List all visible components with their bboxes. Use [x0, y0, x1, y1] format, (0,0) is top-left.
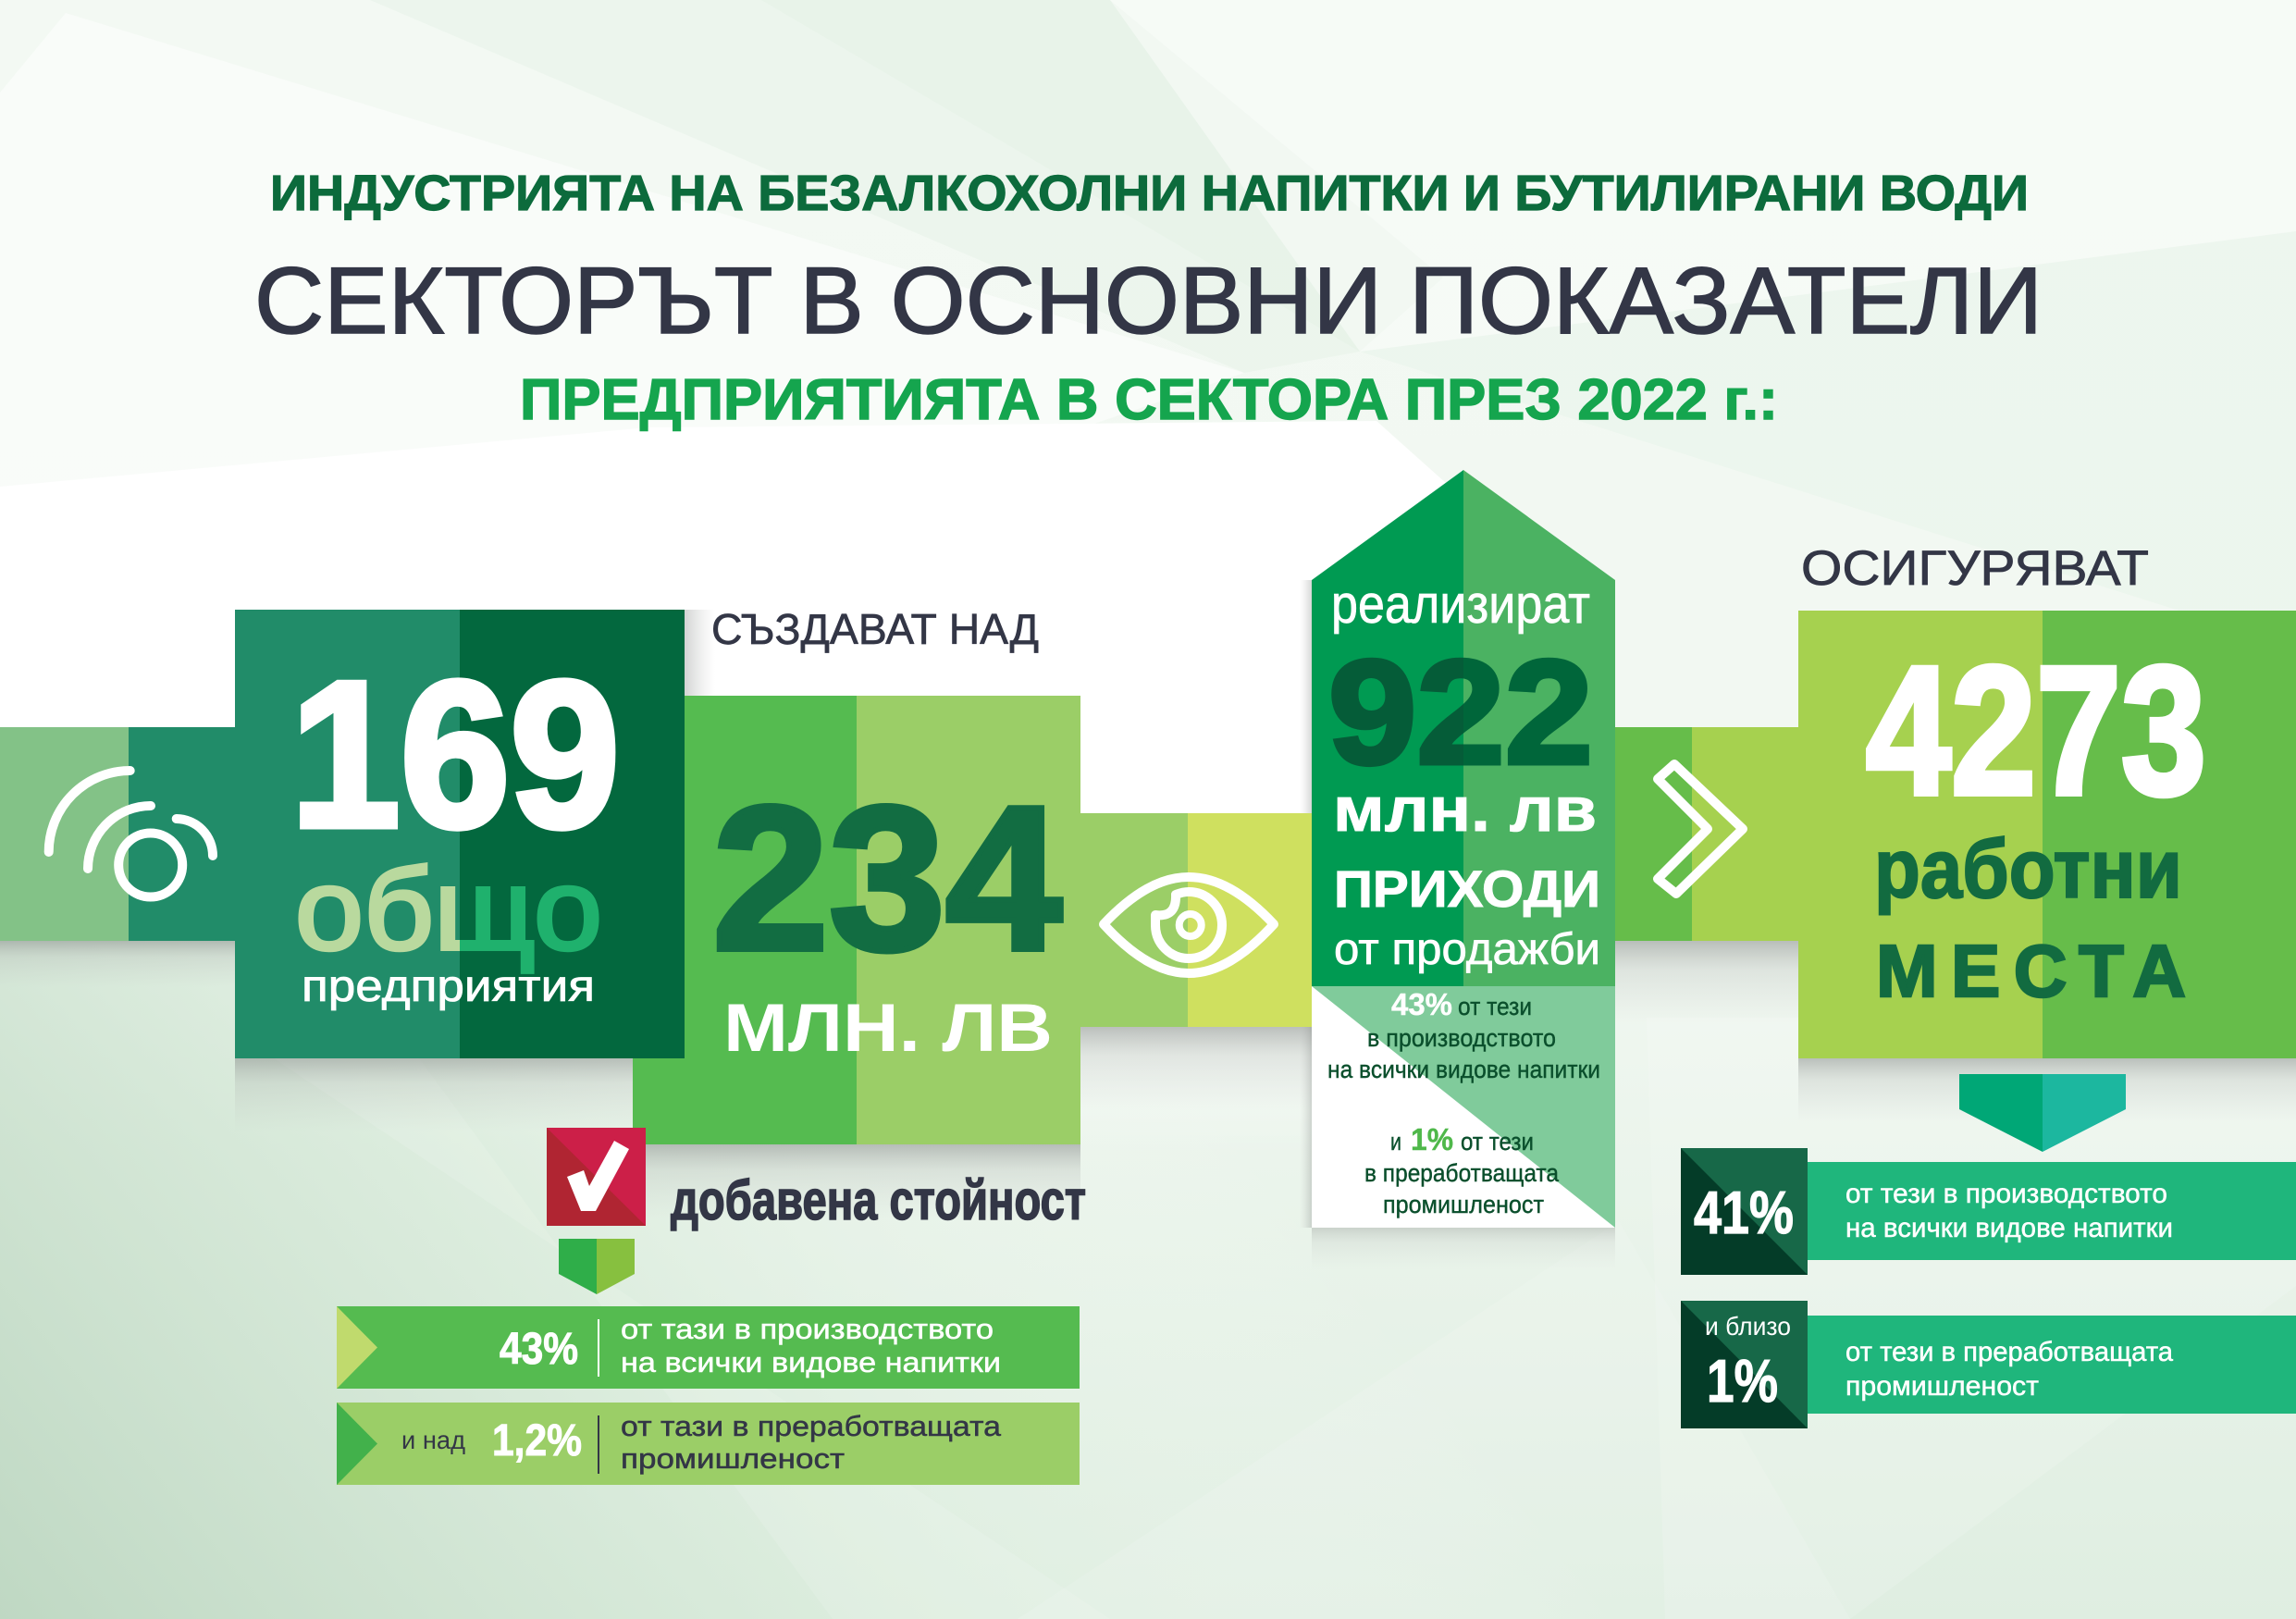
text: production share: на всички видове напитки [621, 1346, 1001, 1378]
text: processing share: от тази в преработващата [621, 1410, 1002, 1442]
number: 4273: 4273 [1866, 628, 2206, 833]
text: production: от тези в производството [1845, 1179, 2167, 1209]
label: million leva: МЛН. ЛВ [723, 991, 1053, 1066]
text: 1% of these: и [1390, 1128, 1401, 1156]
heading: sector: СЕКТОРЪТ В ОСНОВНИ ПОКАЗАТЕЛИ [254, 248, 2043, 353]
text: production: на всички видове напитки [1845, 1213, 2173, 1243]
text: 1% of these: 1% [1411, 1122, 1453, 1156]
text: over: и над [401, 1426, 465, 1454]
arrow: chevron [1658, 764, 1743, 894]
label: revenue: ПРИХОДИ [1334, 859, 1600, 918]
text: 43% of these: в производството [1367, 1024, 1556, 1052]
text: processing share: промишленост [621, 1442, 845, 1475]
panel: 922 million revenue arrow [1312, 470, 1615, 1228]
text: production [1845, 1179, 2173, 1243]
text: processing [1845, 1337, 2173, 1402]
text: near: и близо [1705, 1312, 1791, 1341]
value: 1%: 1% [1707, 1347, 1778, 1415]
text: realize: реализират [1331, 575, 1590, 635]
label: from sales: от продажби [1334, 925, 1600, 974]
panel: 43% bar [337, 1306, 1080, 1389]
label: places: МЕСТА [1876, 930, 2186, 1012]
number: 169: 169 [290, 637, 620, 871]
text: processing: промишленост [1845, 1371, 2039, 1402]
icon: eye [1104, 877, 1274, 973]
label: working: работни [1874, 823, 2182, 916]
drop shadows under the bands [0, 580, 2296, 1269]
panel: band behind eye [1080, 813, 1312, 1027]
arrow: teal down [1959, 1074, 2126, 1152]
text: production share: от тази в производството [621, 1313, 994, 1345]
text: 43% of these [1327, 987, 1600, 1083]
text: 1% of these: от тези [1461, 1128, 1534, 1156]
icon: check mark [547, 1128, 646, 1226]
label: create over: СЪЗДАВАТ НАД [711, 605, 1039, 653]
label: общо: общо [295, 846, 602, 974]
panel: band with chevron [1615, 727, 1799, 941]
text: 1% of these [1364, 1122, 1560, 1218]
text: processing: от тези в преработващата [1845, 1337, 2173, 1367]
panel: 1,2% bar [337, 1403, 1080, 1485]
label: provide: ОСИГУРЯВАТ [1801, 541, 2149, 596]
panel: band with signal icon [0, 727, 236, 941]
text: 43% of these: от тези [1458, 993, 1532, 1020]
arrow: small down [559, 1239, 635, 1294]
number: 922: 922 [1328, 629, 1593, 795]
panel: 4273 jobs [1798, 611, 2296, 1058]
panel: 41% [1681, 1148, 2296, 1275]
panel: red check and added value [547, 1128, 1086, 1294]
panel: 1% [1681, 1301, 2296, 1428]
text: 43% of these: на всички видове напитки [1327, 1056, 1600, 1083]
icon: signal [49, 771, 213, 897]
value: 1,2%: 1,2% [492, 1416, 582, 1465]
text: 43% of these: 43% [1391, 987, 1452, 1021]
number: 234: 234 [712, 764, 1062, 994]
subheading: enterprises in 2022: ПРЕДПРИЯТИЯТА В СЕКТОРА ПРЕЗ 2022 г.: [520, 368, 1778, 432]
title: industry: ИНДУСТРИЯТА НА БЕЗАЛКОХОЛНИ НАПИТКИ И БУТИЛИРАНИ ВОДИ [270, 166, 2029, 221]
text: 1% of these: промишленост [1383, 1191, 1544, 1218]
label: предприятия: предприятия [302, 962, 595, 1011]
panel: 169 enterprises [235, 610, 685, 1058]
label: added value: добавена стойност [671, 1169, 1086, 1231]
text: production share [621, 1313, 1001, 1378]
text: processing share [621, 1410, 1002, 1475]
label: million leva: млн. лв [1333, 774, 1597, 845]
panel: 234 million [633, 696, 1080, 1144]
value: 43%: 43% [500, 1325, 578, 1374]
text: 1% of these: в преработващата [1364, 1159, 1560, 1187]
value: 41%: 41% [1694, 1179, 1794, 1246]
